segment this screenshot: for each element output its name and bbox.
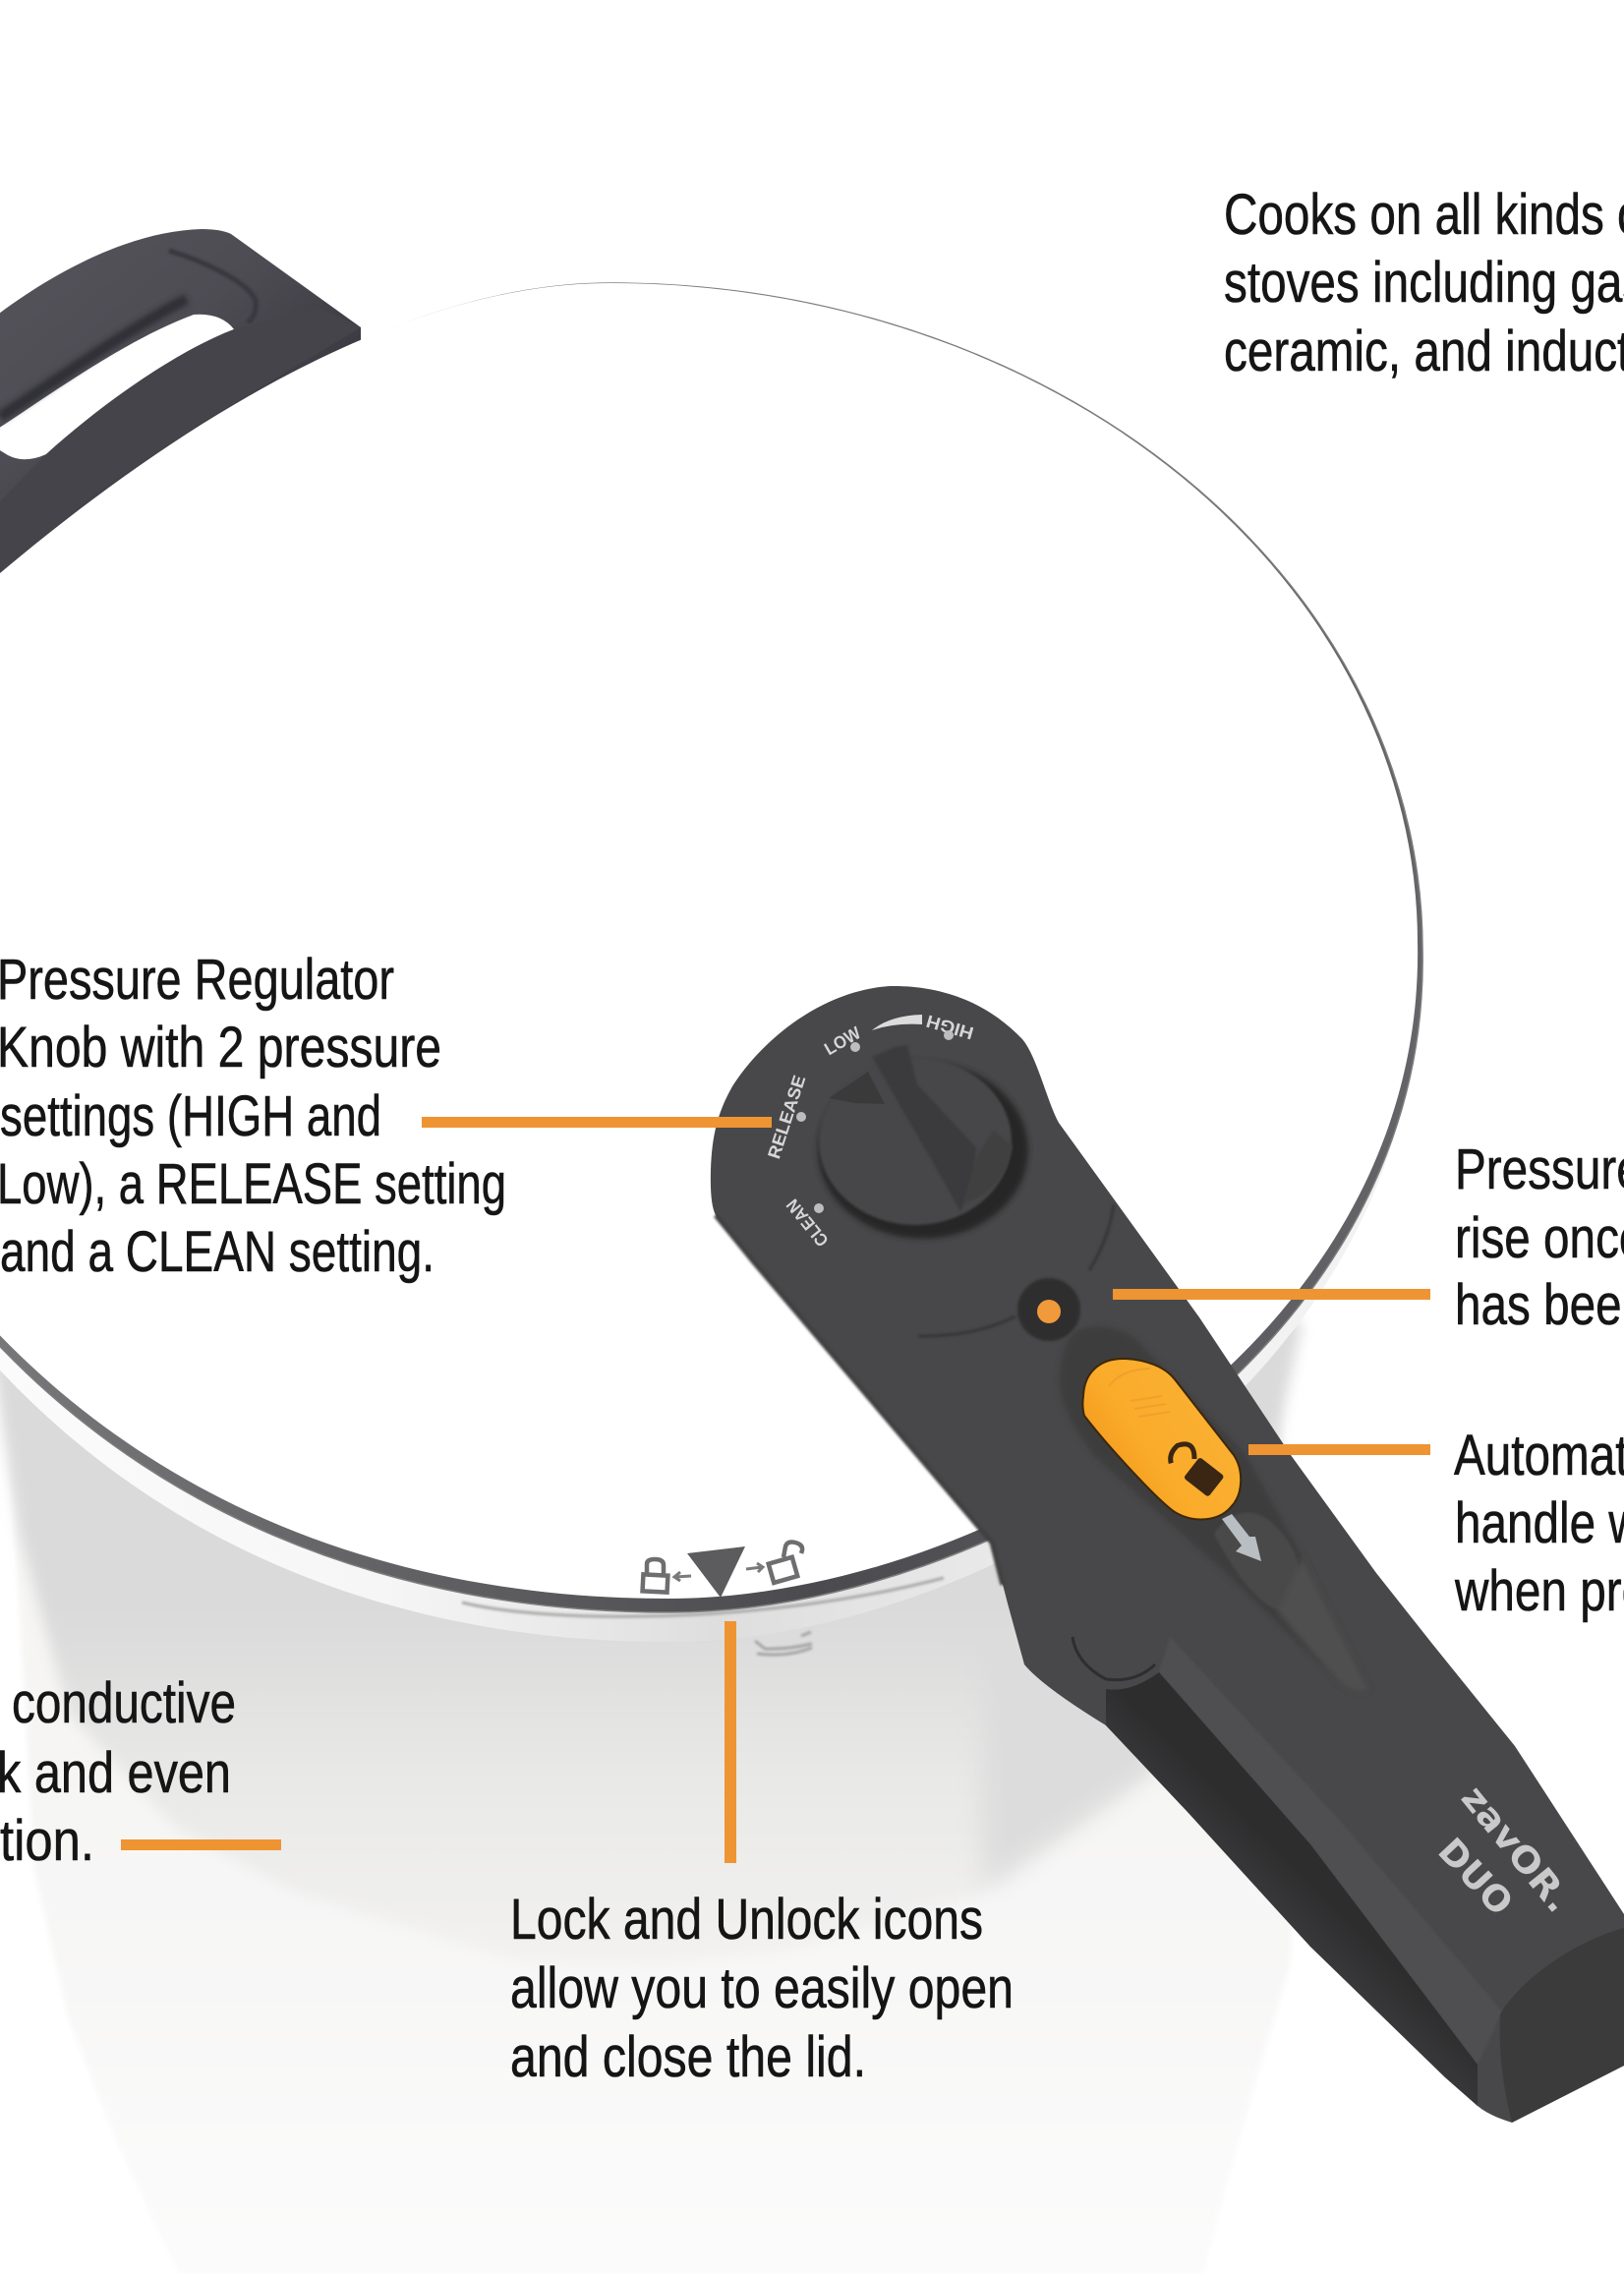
leader line: indicator [1113, 1289, 1430, 1300]
dial labels: RELEASE [764, 1073, 809, 1161]
dial labels: CLEAN [783, 1195, 833, 1251]
leader line: slider [1248, 1444, 1430, 1455]
regulator knob [818, 1045, 1028, 1239]
pressure wedge [872, 1015, 922, 1030]
lid outer rim [0, 283, 1422, 1612]
handle lower band [0, 308, 361, 573]
grip rib [1159, 1637, 1502, 2065]
text: stoves [1224, 184, 1624, 383]
dial labels: HIGH [924, 1011, 976, 1043]
text: conductive base: k and even [0, 1741, 231, 1805]
icon: lock [643, 1559, 667, 1593]
pot side shading [983, 1416, 1268, 1888]
indicator recess arcs [918, 1204, 1114, 1336]
text: lock and unlock: Lock and Unlock icons [510, 1888, 983, 1952]
icon: left arrow [674, 1572, 691, 1581]
knob rib [872, 1045, 976, 1212]
lid top [0, 283, 1418, 1599]
brand logo: zavOR. [1453, 1778, 1579, 1921]
leader line: regulator [422, 1117, 772, 1128]
slider button [1082, 1359, 1241, 1519]
knob wedge [829, 1072, 885, 1104]
side handle [0, 229, 361, 610]
text: pressure regulator: settings (HIGH and [0, 1084, 381, 1148]
brand logo: DUO [1429, 1831, 1520, 1924]
end cap [1500, 1928, 1624, 2123]
handle channel [0, 299, 187, 417]
handle body [711, 986, 1624, 2123]
leader line: base [121, 1839, 281, 1850]
text: conductive base [0, 1671, 236, 1873]
dial labels [764, 1011, 976, 1251]
slider recess [1059, 1326, 1369, 1692]
text: conductive base: conductive [12, 1671, 236, 1735]
handle lower bevel [716, 1215, 1003, 1585]
text: automatic lock [1454, 1425, 1624, 1623]
rim stamp mark [755, 1632, 812, 1655]
pressure indicator [1017, 1278, 1080, 1341]
rim highlight [462, 1578, 944, 1616]
lid rim band [0, 283, 1418, 1642]
text: lock and unlock [510, 1888, 1014, 2089]
text: pressure regulator: Pressure Regulator [0, 948, 394, 1012]
text: pressure regulator [0, 948, 506, 1284]
text: conductive base: tion. [0, 1809, 94, 1873]
text: lock and unlock: allow you to easily open [510, 1956, 1014, 2020]
grip slot [1106, 1672, 1478, 2106]
icon: right arrow [746, 1563, 763, 1572]
knob right face [963, 1131, 1013, 1202]
text: pressure regulator: and a CLEAN setting. [0, 1220, 435, 1284]
dial labels: LOW [821, 1022, 864, 1059]
hinge notch [1073, 1637, 1155, 1680]
dial dots [796, 1030, 954, 1213]
pot reflection [0, 1347, 1307, 2274]
lock and unlock icons [643, 1542, 802, 1598]
icon: slider unlock [1164, 1439, 1226, 1497]
pot body [0, 1278, 1303, 1966]
handle recess edge [169, 251, 256, 322]
icon: pointer triangle [687, 1546, 745, 1598]
leader line: lock icons [725, 1621, 736, 1863]
text: pressure regulator: Low), a RELEASE setting [0, 1152, 506, 1216]
main handle [711, 986, 1624, 2123]
text: lock and unlock: and close the lid. [510, 2025, 866, 2089]
text: pressure indicator [1455, 1138, 1624, 1337]
text: pressure regulator: Knob with 2 pressure [0, 1016, 441, 1079]
icon: slide arrow [1222, 1514, 1261, 1561]
icon: unlock [769, 1542, 802, 1583]
